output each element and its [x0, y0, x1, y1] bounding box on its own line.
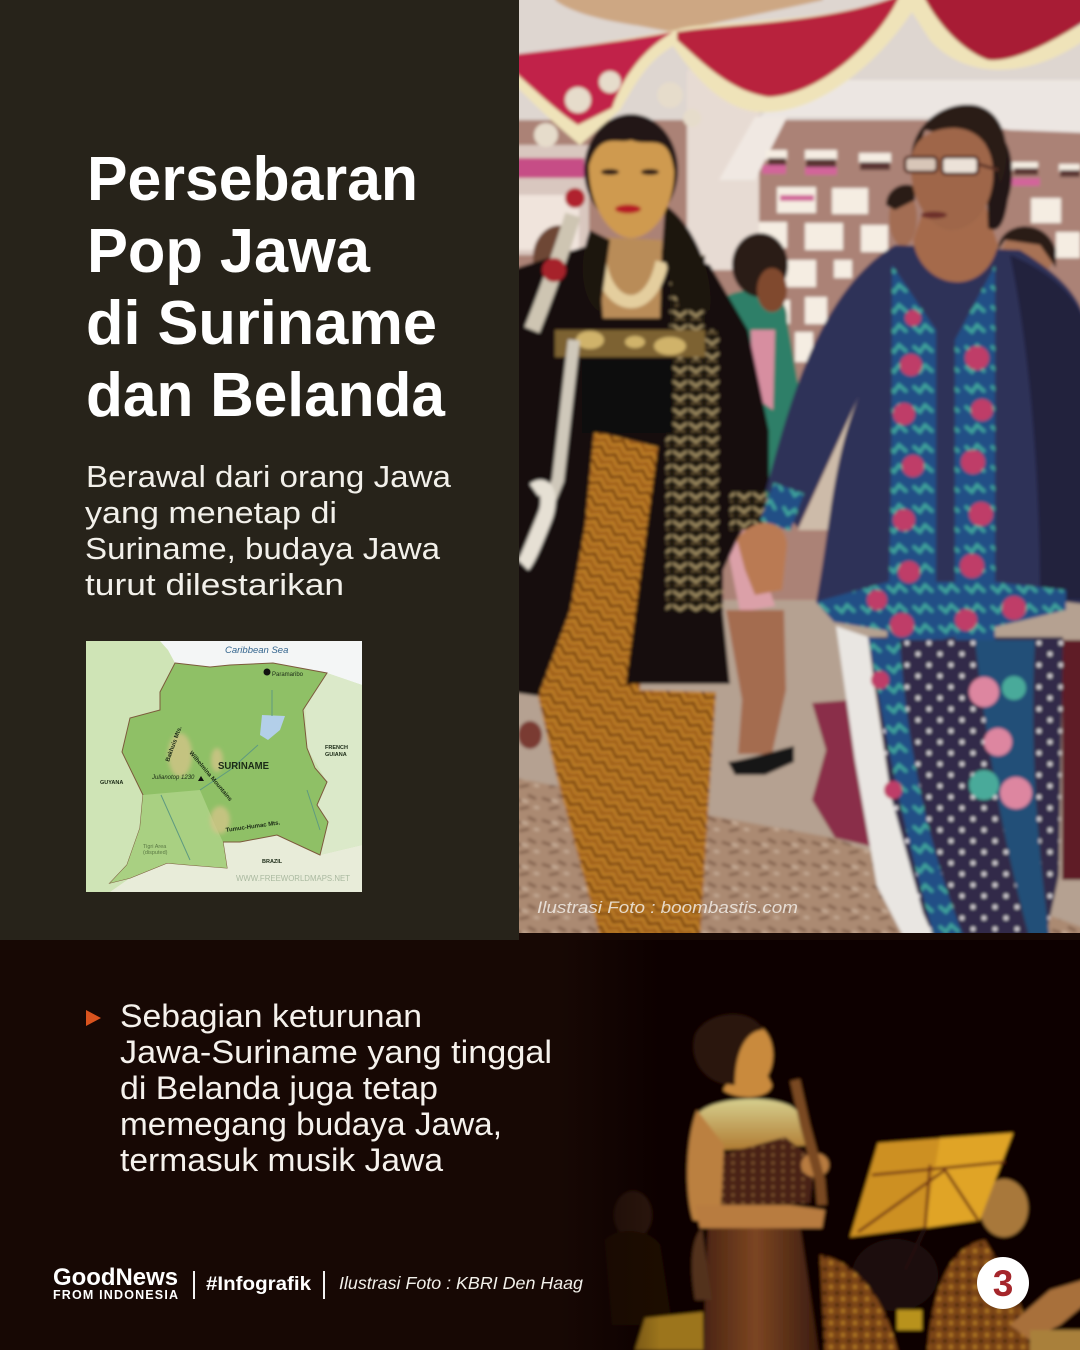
- map of Suriname: Paramaribo: [272, 672, 304, 678]
- intro text: turut dilestarikan: [85, 567, 344, 602]
- floor: [536, 597, 1080, 692]
- neck: [597, 237, 662, 318]
- photo: musician in Den Haag: [615, 940, 1080, 1350]
- bullet text: di Belanda juga tetap: [120, 1070, 438, 1106]
- map of Suriname: (disputed): [143, 850, 168, 856]
- background people: [531, 223, 574, 266]
- map of Suriname: SURINAME: [218, 761, 269, 772]
- footer logo: GoodNews: [53, 1264, 178, 1291]
- title: [86, 145, 446, 430]
- map of Suriname: Caribbean Sea: [225, 645, 288, 656]
- embroidery left: [525, 340, 574, 560]
- neck and head: [913, 205, 998, 282]
- saxophone player: [687, 1014, 829, 1350]
- bullet text: Sebagian keturunan: [120, 998, 422, 1034]
- map of Suriname: Tigri Area: [143, 844, 167, 850]
- bullet text: [120, 998, 552, 1178]
- intro text: Suriname, budaya Jawa: [85, 531, 441, 566]
- bunting: [555, 0, 823, 32]
- photo credit: Ilustrasi Foto : boombastis.com: [537, 898, 798, 917]
- footer divider one: [193, 1271, 195, 1299]
- map of Suriname: FRENCH: [325, 745, 348, 751]
- page number badge: [977, 1257, 1029, 1309]
- hair: [583, 205, 711, 312]
- ceiling and wall: [510, 0, 1080, 940]
- intro text: yang menetap di: [85, 495, 337, 530]
- wall blocks: [759, 150, 1080, 362]
- hands: [737, 523, 787, 595]
- bullet arrow: [86, 1010, 101, 1026]
- map of Suriname: GUYANA: [100, 780, 123, 786]
- left woman: [510, 71, 769, 940]
- title: dan Belanda: [86, 361, 446, 430]
- face: [589, 140, 674, 238]
- map of Suriname: [86, 641, 362, 892]
- title: Pop Jawa: [87, 217, 371, 286]
- map of Suriname: Tumuc-Humac Mts.: [225, 820, 281, 834]
- bullet text: Jawa-Suriname yang tinggal: [120, 1034, 552, 1070]
- title: di Suriname: [86, 289, 437, 358]
- footer divider two: [323, 1271, 325, 1299]
- right woman: [737, 104, 1080, 940]
- map of Suriname: GUIANA: [325, 752, 347, 758]
- footer logo: FROM INDONESIA: [53, 1288, 178, 1302]
- panel: title panel background: [0, 0, 519, 940]
- page number badge: 3: [993, 1263, 1013, 1304]
- photo: Javanese women in Suriname: [510, 0, 1080, 940]
- seated man: [605, 1191, 703, 1350]
- map of Suriname: Wilhelmina Mountains: [187, 750, 233, 803]
- bullet text: memegang budaya Jawa,: [120, 1106, 502, 1142]
- map of Suriname: WWW.FREEWORLDMAPS.NET: [236, 874, 350, 883]
- bullet text: termasuk musik Jawa: [120, 1142, 443, 1178]
- hashtag: #Infografik: [206, 1274, 311, 1295]
- fade edge: [560, 940, 660, 1350]
- map of Suriname: BRAZIL: [262, 859, 283, 865]
- music stand: [847, 1130, 1016, 1246]
- seated players: [820, 1179, 1080, 1350]
- map of Suriname: Julianotop 1230: [151, 775, 195, 781]
- intro text: [85, 459, 452, 602]
- map of Suriname: Bakhuis Mts.: [165, 726, 184, 763]
- footer photo credit: Ilustrasi Foto : KBRI Den Haag: [339, 1273, 583, 1293]
- country shape: [110, 663, 328, 883]
- intro text: Berawal dari orang Jawa: [86, 459, 452, 494]
- title: Persebaran: [87, 145, 418, 214]
